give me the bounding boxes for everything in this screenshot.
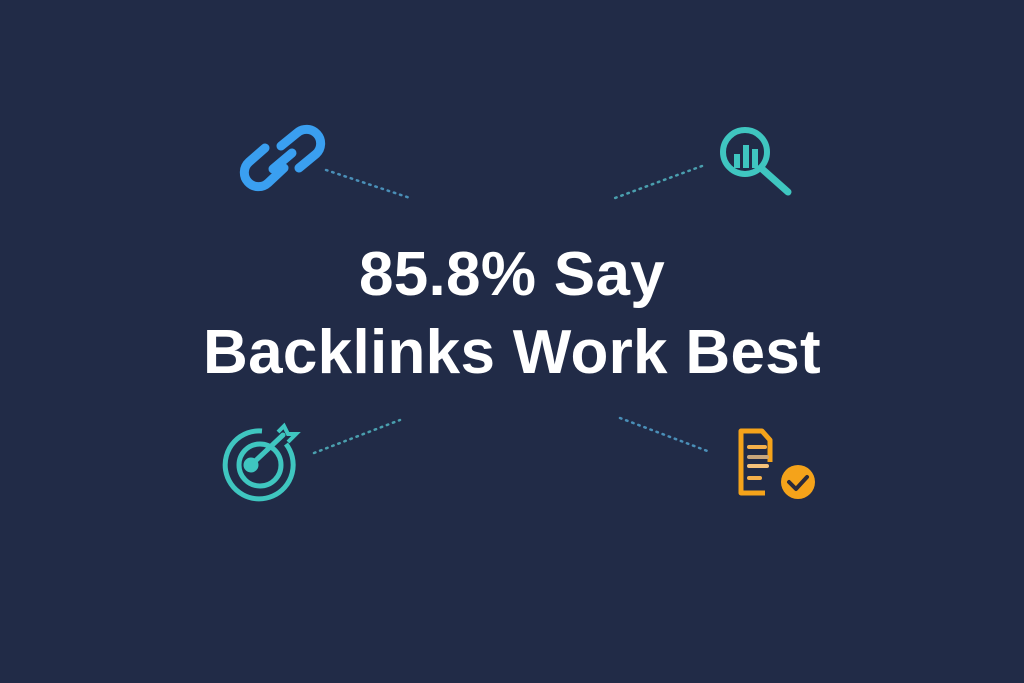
connector: bottom-right bbox=[620, 418, 710, 452]
title bbox=[203, 240, 821, 387]
connector: top-right bbox=[615, 166, 702, 198]
title: 85.8% Say bbox=[359, 240, 665, 309]
title: Backlinks Work Best bbox=[203, 318, 821, 387]
connector: top-left bbox=[326, 170, 410, 198]
connector: bottom-left bbox=[314, 420, 400, 453]
icon: link bbox=[244, 129, 321, 187]
icon: target bbox=[225, 426, 296, 499]
icon: magnifier chart bbox=[723, 130, 788, 192]
icon: document check bbox=[741, 431, 815, 499]
